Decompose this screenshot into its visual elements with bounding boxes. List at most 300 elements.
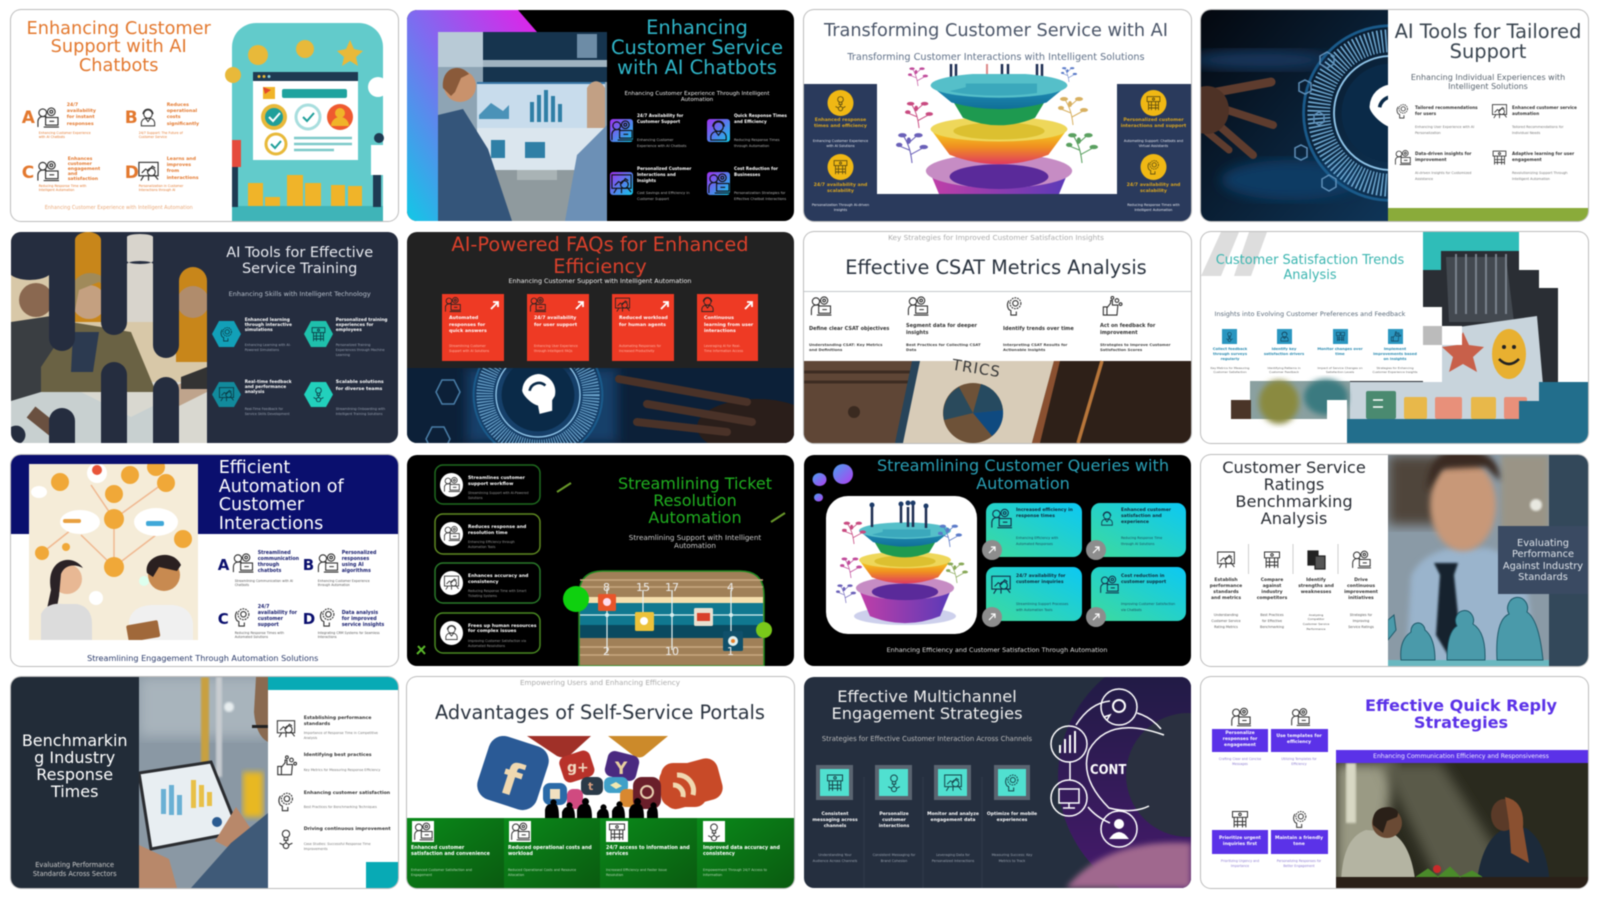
card text: experience xyxy=(1121,520,1149,525)
box text xyxy=(1276,734,1322,746)
item sub: Key Metrics for Measuring Response Efficiency xyxy=(304,768,380,772)
icon: bulb xyxy=(835,96,846,112)
card text xyxy=(1121,508,1171,525)
icon xyxy=(884,773,904,792)
box text: responses for xyxy=(1223,737,1257,742)
icon xyxy=(1099,508,1115,529)
title xyxy=(226,246,373,277)
title xyxy=(27,19,212,76)
item text: resolution time xyxy=(468,531,508,536)
letter C: C xyxy=(218,610,229,628)
item heading: 24/7 availability and xyxy=(814,183,867,188)
panel: Efficient Automation of Customer Interactions xyxy=(11,455,398,666)
item text xyxy=(336,380,384,393)
item sub: Satisfaction Scores xyxy=(1100,347,1142,352)
card text: 24/7 availability xyxy=(534,316,576,321)
item heading: times and efficiency xyxy=(814,124,867,129)
item text: support workflow xyxy=(468,482,513,487)
icon xyxy=(990,508,1012,529)
title: Streamlining Ticket xyxy=(618,474,772,492)
item sub: Benchmarking xyxy=(1260,625,1284,629)
item text: Act on feedback for xyxy=(1100,323,1155,329)
item A text: responses xyxy=(67,122,94,127)
item text: standards xyxy=(1213,590,1239,595)
item sub: Enhancing Learning with AI- xyxy=(245,343,291,347)
item sub: through Automation xyxy=(734,144,769,148)
title: Chatbots xyxy=(79,56,158,76)
item sub xyxy=(1512,125,1563,136)
item sub: Intelligent Training Solutions xyxy=(336,412,383,416)
item text: Reduces response and xyxy=(468,525,526,530)
item sub: for Effective xyxy=(1262,619,1282,623)
item B text xyxy=(166,102,200,127)
item text: Personalized Customer xyxy=(637,166,691,171)
card text: customer inquiries xyxy=(1016,580,1064,585)
title: AI-Powered FAQs for Enhanced xyxy=(451,233,749,256)
item text xyxy=(636,166,692,184)
item text: workload xyxy=(508,852,533,857)
card text: interactions xyxy=(704,329,736,334)
item text xyxy=(1100,323,1155,337)
item B text: Reduces xyxy=(167,103,189,108)
title: Efficiency xyxy=(553,255,647,278)
item text: responses xyxy=(342,557,369,562)
card sub xyxy=(619,344,661,354)
icon xyxy=(704,822,724,841)
item sub: Personalized Interactions xyxy=(932,859,974,863)
item sub xyxy=(636,138,687,148)
icon: gear head xyxy=(275,791,297,812)
item C text: satisfaction xyxy=(68,176,98,182)
item sub xyxy=(508,868,576,879)
box sub: Importance xyxy=(1231,864,1249,868)
title: Benchmarking xyxy=(1235,492,1353,511)
item sub: Customer Satisfaction xyxy=(1213,370,1247,374)
item B letter: B xyxy=(125,108,138,128)
illustration: layered funnel xyxy=(803,63,1192,222)
title: Automation xyxy=(976,474,1070,493)
item sub xyxy=(636,191,690,201)
number: 15 xyxy=(636,581,650,594)
item text: Identifying best practices xyxy=(304,753,372,758)
item sub xyxy=(873,852,915,864)
icon: gear bulb xyxy=(275,828,297,849)
item text xyxy=(906,323,977,337)
item C text: engagement xyxy=(68,166,100,172)
icon: chart board xyxy=(138,161,160,182)
item heading xyxy=(1120,116,1187,129)
item sub: Strategies for xyxy=(1350,613,1372,617)
item text xyxy=(879,812,909,830)
item text: through surveys xyxy=(1213,352,1247,356)
item heading xyxy=(814,116,868,129)
item text: improvements based xyxy=(1373,352,1417,356)
item text: Streamlines customer xyxy=(468,476,525,481)
item text: for improved xyxy=(342,617,377,622)
panel: Transforming Customer Service with AI xyxy=(804,10,1191,221)
item text: Adaptive learning for user xyxy=(1512,151,1574,156)
item text: consistency xyxy=(468,580,498,585)
item text: messaging across xyxy=(812,818,858,823)
panel: Streamlining Customer Queries with Automation xyxy=(804,455,1191,666)
card text: 24/7 availability for xyxy=(1016,574,1066,579)
cycle label: CONT xyxy=(1090,763,1126,778)
item text xyxy=(927,812,979,824)
icon xyxy=(316,607,339,627)
box text: efficiency xyxy=(1287,740,1311,745)
box text: engagement xyxy=(1224,743,1256,748)
title: Strategies xyxy=(1414,712,1508,732)
panel: Streamlining Ticket Resolution Automation xyxy=(407,455,794,666)
subtitle xyxy=(624,90,770,103)
item sub: Improving xyxy=(1353,619,1369,623)
item sub: Improving Customer Satisfaction via xyxy=(468,638,526,642)
title: Response xyxy=(36,764,113,784)
subtitle: Automation xyxy=(681,97,713,103)
photo: analysts at monitor xyxy=(406,9,608,222)
item sub xyxy=(606,868,667,879)
card text xyxy=(449,316,487,335)
icon xyxy=(1290,809,1310,829)
item sub: Strategies to Improve Customer xyxy=(1100,342,1171,347)
title xyxy=(22,732,128,800)
item text xyxy=(1317,347,1363,357)
item text xyxy=(987,812,1037,824)
panel: AI-Powered FAQs for Enhanced Efficiency xyxy=(407,232,794,443)
icon xyxy=(316,553,339,573)
item sub: Automation Tools xyxy=(468,545,495,549)
panel: Effective CSAT Metrics Analysis xyxy=(804,232,1191,443)
graphic: continuous cycle xyxy=(804,677,1191,888)
item text: 24/7 access to information and xyxy=(606,846,690,850)
icon xyxy=(231,553,254,573)
item text: Insights xyxy=(637,178,656,183)
panel: Effective Multichannel Engagement Strategies xyxy=(804,677,1191,888)
kicker: Key Strategies for Improved Customer Satisfaction Insights xyxy=(888,233,1104,242)
item sub xyxy=(813,852,857,864)
icon xyxy=(1290,707,1310,727)
box sub: Messages xyxy=(1232,762,1248,766)
item text: Collect feedback xyxy=(1213,347,1247,351)
item sub xyxy=(235,631,284,639)
illustration: chatbot dashboard xyxy=(224,22,385,222)
photo: metrics report on wood desk xyxy=(804,232,1191,443)
item sub: Experience with AI Chatbots xyxy=(637,144,686,148)
item sub xyxy=(336,407,385,417)
item text xyxy=(342,551,376,575)
item text xyxy=(468,476,525,487)
title xyxy=(618,474,772,526)
title xyxy=(451,234,749,278)
icon: board xyxy=(1146,96,1161,111)
item sub: and Definitions xyxy=(809,347,842,352)
item sub: Assistance xyxy=(1415,177,1433,181)
item D text: improves xyxy=(167,163,191,168)
icon xyxy=(529,296,546,313)
box text: Prioritize urgent xyxy=(1219,836,1261,841)
letter A: A xyxy=(218,556,229,574)
item sub xyxy=(1211,367,1249,375)
icon xyxy=(607,822,627,841)
item text: Compare xyxy=(1261,578,1283,583)
illustration: funnel and teal cards xyxy=(804,455,1191,666)
item text: engagement data xyxy=(931,818,975,823)
item sub: Understanding Your xyxy=(818,853,852,857)
card sub: Increased Productivity xyxy=(619,349,654,353)
card text xyxy=(534,316,577,329)
card sub: Streamlining Support Processes xyxy=(1016,602,1068,606)
item sub: Engagement xyxy=(411,873,432,877)
item B sub: Customer Service xyxy=(139,135,167,139)
item sub: Enhancing Customer Experience xyxy=(813,138,868,142)
item sub: Reducing Response Times with xyxy=(235,631,284,635)
item text: against xyxy=(1263,584,1281,589)
card sub: Automating Responses for xyxy=(619,344,661,348)
item sub: Automating Support: Chatbots and xyxy=(1124,138,1183,142)
box sub: Efficiency xyxy=(1291,762,1307,766)
item sub: Intelligent Automation xyxy=(1512,177,1550,181)
title: Customer Service xyxy=(1222,458,1366,477)
illustration: social media blobs and green band: g+ xyxy=(567,760,589,776)
item text: strengths and xyxy=(1298,584,1334,589)
card text: Automated xyxy=(449,316,478,321)
item text xyxy=(636,112,684,125)
box sub xyxy=(1277,858,1321,870)
item sub xyxy=(1318,367,1362,375)
card sub: through AI Solutions xyxy=(1121,542,1154,546)
item text xyxy=(1257,578,1287,602)
box sub xyxy=(1221,858,1259,870)
title: Effective Multichannel xyxy=(837,686,1017,706)
item sub: Empowerment Through 24/7 Access to xyxy=(703,868,767,872)
item sub: Analyzing xyxy=(1309,612,1323,616)
item text: Scalable solutions xyxy=(336,380,384,385)
item A sub: with AI Chatbots xyxy=(39,135,65,139)
item text: Personalize xyxy=(879,812,909,817)
item text: Define clear CSAT objectives xyxy=(809,326,889,332)
photo: tablet in factory xyxy=(11,677,398,888)
icon: brain xyxy=(1394,103,1411,119)
icon: agent xyxy=(140,108,156,128)
item sub: Reduced Operational Costs and Resource xyxy=(508,868,576,872)
item sub: Resolution xyxy=(606,873,623,877)
subtitle: Standards Across Sectors xyxy=(33,870,117,878)
panel: Enhancing Customer Support with AI Chatbots xyxy=(11,10,398,221)
item sub xyxy=(809,342,882,352)
card text: Cost reduction in xyxy=(1121,574,1164,579)
subtitle: Streamlining Support with Intelligent xyxy=(629,533,761,542)
item sub: Enhancing Efficiency through xyxy=(468,540,515,544)
icon xyxy=(809,296,832,316)
item text: Monitor and analyze xyxy=(927,812,979,817)
item heading xyxy=(1127,183,1180,195)
item C text: and xyxy=(68,172,77,176)
title: Customer Satisfaction Trends xyxy=(1216,253,1404,268)
item D text: from xyxy=(167,169,179,174)
card sub: Time Information Access xyxy=(704,349,743,353)
item sub xyxy=(235,578,293,586)
item sub: Tailored Recommendations for xyxy=(1512,125,1563,129)
item B text: costs xyxy=(167,115,181,120)
item heading: Enhanced response xyxy=(815,118,866,123)
icon: square xyxy=(1388,329,1403,344)
illustration: social media blobs and green band: t xyxy=(588,780,593,793)
item text: chatbots xyxy=(258,569,281,574)
icon: square xyxy=(1277,329,1292,344)
title: Enhancing xyxy=(646,16,748,38)
card text xyxy=(1016,574,1066,586)
illustration: social media blobs and green band: f xyxy=(494,753,529,808)
subtitle xyxy=(1411,72,1565,91)
item text: regularly xyxy=(1221,357,1239,361)
card sub xyxy=(704,344,743,354)
item text: Personalized xyxy=(342,551,376,556)
item sub: Insights xyxy=(834,208,847,212)
card text: Reduced workload xyxy=(619,316,668,321)
card text xyxy=(1121,574,1166,586)
item sub: Interpreting CSAT Results for xyxy=(1003,342,1067,347)
box sub: Personalizing Responses for xyxy=(1277,858,1321,862)
photo: two people conversing and purple boxes xyxy=(1201,677,1588,888)
item sub xyxy=(1415,171,1471,182)
item text: simulations xyxy=(245,328,273,333)
title: Automation of xyxy=(219,477,344,497)
card sub: Automated Responses xyxy=(1016,542,1053,546)
item sub xyxy=(245,343,291,353)
item sub: Streamlining Onboarding with xyxy=(336,407,385,411)
number: 10 xyxy=(665,645,679,658)
icon: calculator xyxy=(1306,550,1326,569)
callout: Performance xyxy=(1512,549,1574,560)
photo and red boxes xyxy=(407,232,794,443)
item sub: Intelligent Automation xyxy=(1135,208,1172,212)
card sub xyxy=(534,344,578,354)
item text xyxy=(1373,347,1417,362)
box text: tone xyxy=(1293,842,1305,847)
title: AI Tools for Effective xyxy=(226,245,373,261)
item sub: Actionable Insights xyxy=(1003,347,1045,352)
item text: Establish xyxy=(1214,578,1238,583)
item sub: Best Practices xyxy=(1260,613,1284,617)
subtitle: Enhancing Individual Experiences with xyxy=(1411,72,1565,82)
item sub xyxy=(468,638,526,648)
item text: through xyxy=(258,563,279,568)
item heading: scalability xyxy=(1140,189,1167,194)
item sub xyxy=(1211,612,1241,630)
item text: and metrics xyxy=(1211,596,1241,601)
item text: Monitor changes over xyxy=(1317,347,1363,351)
title: Analysis xyxy=(1261,509,1327,528)
card text: Enhanced customer xyxy=(1121,508,1171,513)
item sub xyxy=(1348,612,1374,630)
item C sub xyxy=(38,184,87,192)
item text xyxy=(606,846,690,859)
item text: Frees up human resources xyxy=(468,624,537,628)
item text: service insights xyxy=(342,623,384,628)
item text xyxy=(1213,347,1247,362)
item sub: Increased Efficiency and Faster Issue xyxy=(606,868,667,872)
item text: customer xyxy=(258,617,283,622)
item sub xyxy=(734,138,780,148)
item text: availability for xyxy=(258,611,297,616)
card text xyxy=(1016,508,1073,520)
item sub: Service Skills Development xyxy=(245,412,290,416)
item text xyxy=(1344,578,1378,602)
item text: satisfaction and convenience xyxy=(411,852,490,857)
item text: Enhances accuracy and xyxy=(468,574,528,579)
item sub: Allocation xyxy=(508,873,524,877)
item A sub xyxy=(38,130,91,139)
kicker: Empowering Users and Enhancing Efficiency xyxy=(520,678,680,687)
item sub xyxy=(1003,342,1067,352)
item C text: customer xyxy=(68,162,92,166)
item D text: interactions xyxy=(167,176,198,181)
icon xyxy=(1002,773,1022,792)
item sub: Reducing Response Times with xyxy=(1127,202,1180,206)
item sub: Competitor xyxy=(1308,617,1324,621)
box text xyxy=(1275,836,1323,848)
title xyxy=(1395,22,1581,62)
title xyxy=(219,459,344,533)
photo mosaic: feedback icons xyxy=(1201,232,1588,443)
title: Advantages of Self-Service Portals xyxy=(435,700,765,724)
item sub: Case Studies: Successful Response Time xyxy=(304,842,371,846)
item sub: Performance xyxy=(1306,627,1326,631)
item A text: for instant xyxy=(67,115,95,120)
title: with AI Chatbots xyxy=(617,56,777,78)
card text: Increased efficiency in xyxy=(1016,508,1073,513)
card sub: Streamlining Customer xyxy=(449,344,486,348)
item sub: Reducing Response Times xyxy=(734,138,780,142)
item sub: Personalization xyxy=(1415,131,1441,135)
item sub xyxy=(1100,342,1171,352)
item sub: Streamlining Support with AI-Powered xyxy=(468,490,528,494)
subtitle: Insights into Evolving Customer Preferences and Feedback xyxy=(1215,310,1405,318)
card sub: Enhancing User Experience xyxy=(534,344,578,348)
item text: using AI xyxy=(342,563,364,568)
item sub: Experiences through Machine xyxy=(336,348,385,352)
box text xyxy=(1219,836,1261,848)
item text: and Efficiency xyxy=(734,119,767,124)
footer: Enhancing Efficiency and Customer Satisfaction Through Automation xyxy=(887,646,1107,654)
title: Customer Service xyxy=(611,36,783,58)
letter D: D xyxy=(303,610,315,628)
item sub: Solutions xyxy=(468,496,483,500)
item sub xyxy=(992,852,1032,864)
icon: chart xyxy=(1216,550,1236,569)
title: Streamlining Customer Queries with xyxy=(877,456,1169,475)
callout: Against Industry xyxy=(1503,561,1583,572)
item sub xyxy=(411,868,472,879)
item sub: Powered Simulations xyxy=(245,348,279,352)
item text: Enhancing customer satisfaction xyxy=(304,791,390,796)
item text: interactions xyxy=(879,824,909,829)
item heading xyxy=(814,182,868,194)
item D text xyxy=(166,156,199,181)
item sub: Personalization Strategies for xyxy=(734,191,785,195)
box sub xyxy=(1219,756,1261,768)
title: Support with AI xyxy=(51,37,187,57)
item text: Reduced operational costs and xyxy=(508,846,592,850)
item text: 24/7 xyxy=(258,605,269,610)
callout xyxy=(1503,538,1583,583)
item text: Identify trends over time xyxy=(1003,326,1074,332)
item sub: Key Metrics for Measuring xyxy=(1211,366,1249,370)
item heading: interactions and support xyxy=(1121,124,1186,129)
item B sub xyxy=(138,130,184,139)
item text: experiences for xyxy=(336,323,373,328)
card text: quick answers xyxy=(449,329,487,334)
